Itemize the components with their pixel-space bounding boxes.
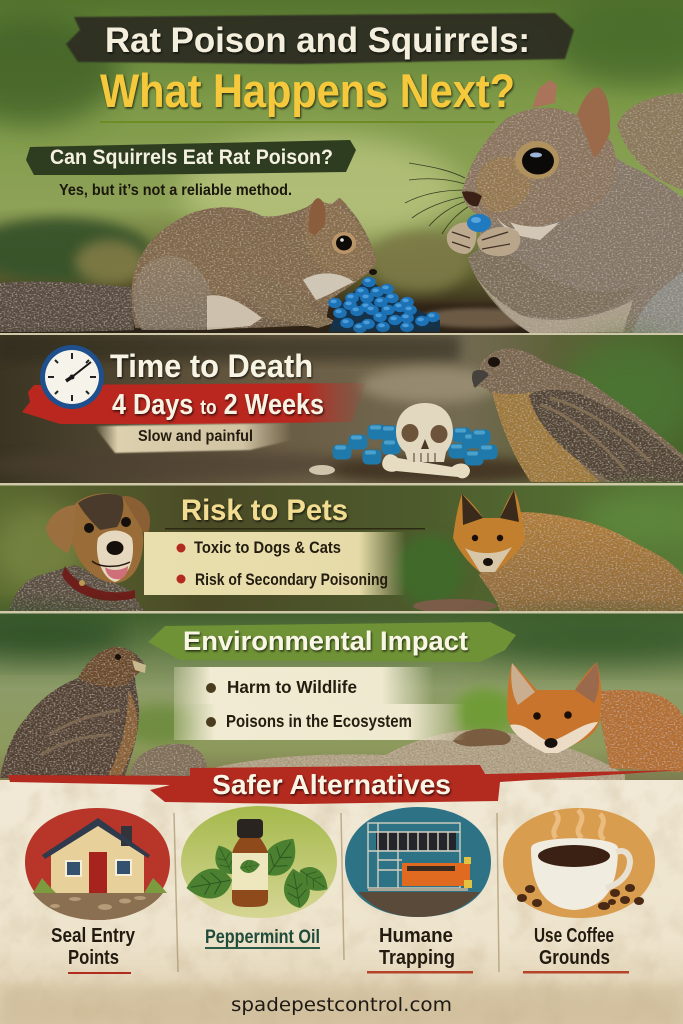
- illustration: skull, bone and pellets: [309, 403, 498, 478]
- ground and rocks: [131, 729, 625, 782]
- illustration: fox: [413, 490, 683, 613]
- list: pet risks: Toxic to Dogs & Cats: [194, 538, 341, 557]
- icon: clock: [40, 345, 104, 409]
- list: environmental harms: Harm to Wildlife: [227, 677, 357, 697]
- card: humane trapping: Trapping: [379, 946, 455, 969]
- list: environmental harms: [174, 667, 466, 740]
- illustration: dog: [9, 493, 150, 611]
- card: peppermint oil: [181, 806, 337, 949]
- text: slow and painful: [94, 423, 292, 453]
- illustration: fox resting: [507, 662, 683, 772]
- text: duration: 4 Days to 2 Weeks: [112, 389, 324, 421]
- card: seal entry points: Seal Entry: [51, 924, 135, 947]
- panel: environmental impact: [0, 611, 683, 782]
- heading: environmental impact: [148, 622, 516, 662]
- heading: can squirrels eat rat poison: [26, 140, 356, 175]
- card: use coffee grounds: Use Coffee: [534, 924, 614, 947]
- card: use coffee grounds: [503, 808, 655, 974]
- panel: can squirrels eat rat poison: [0, 0, 683, 334]
- heading: risk to pets: Risk to Pets: [181, 494, 348, 527]
- illustration: hawk: [472, 348, 683, 482]
- illustration: squirrel eating pellets: [0, 198, 377, 332]
- footer url: spadepestcontrol.com: [231, 994, 452, 1016]
- illustration: hawk: [0, 647, 146, 778]
- heading banner: [8, 765, 683, 804]
- heading: environmental impact: Environmental Impact: [183, 626, 468, 656]
- card: humane trapping: [345, 807, 491, 974]
- text: slow and painful: Slow and painful: [138, 428, 253, 445]
- list: pet risks: [144, 532, 406, 595]
- card: seal entry points: [25, 808, 170, 974]
- heading banner: Safer Alternatives: [212, 769, 451, 800]
- list: pet risks: Risk of Secondary Poisoning: [195, 570, 388, 589]
- pellets pile: [328, 277, 440, 333]
- title: [66, 13, 574, 123]
- heading: can squirrels eat rat poison: Can Squirrels Eat Rat Poison?: [50, 146, 333, 169]
- title: Rat Poison and Squirrels:: [105, 21, 530, 60]
- card: peppermint oil: Peppermint Oil: [205, 927, 320, 948]
- panel: safer alternatives: [0, 765, 683, 1024]
- panel: time to death: [0, 333, 683, 484]
- heading: time to death: Time to Death: [110, 348, 313, 384]
- red banner: [22, 383, 366, 424]
- title: What Happens Next?: [100, 64, 515, 117]
- text: answer: Yes, but it’s not a reliable method.: [59, 182, 292, 199]
- card: seal entry points: Points: [68, 946, 119, 969]
- card: use coffee grounds: Grounds: [539, 946, 610, 969]
- list: environmental harms: Poisons in the Ecosystem: [226, 711, 412, 731]
- illustration: large squirrel close-up: [405, 80, 683, 333]
- card: humane trapping: Humane: [379, 924, 453, 947]
- panel: risk to pets: [0, 483, 683, 613]
